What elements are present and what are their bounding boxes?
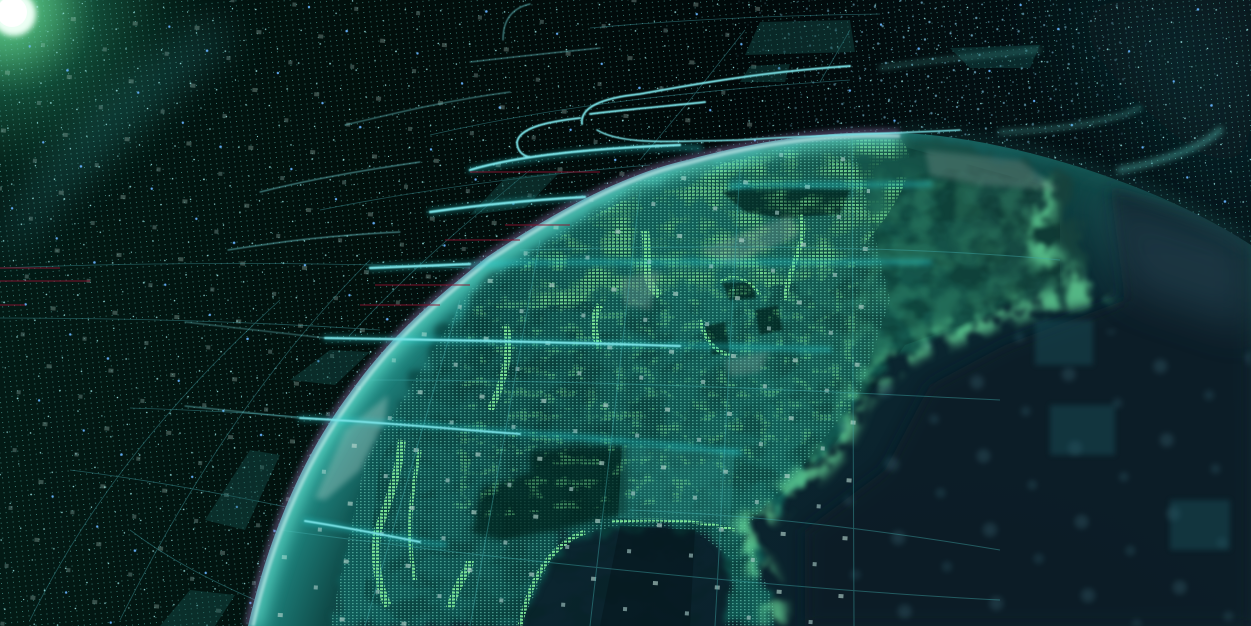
blurred haze far right: [1106, 198, 1251, 328]
cloud drift: [620, 150, 1060, 376]
bright data squares on globe: [250, 130, 870, 626]
sharp streak lines: [185, 4, 960, 542]
latitude and longitude grid: [0, 14, 880, 620]
streak glow layer: [300, 147, 930, 545]
ocean tiles: [1035, 320, 1230, 550]
gulf of mexico tile: [600, 526, 695, 626]
atmosphere rim: [248, 132, 1251, 626]
earth globe: [248, 132, 1251, 626]
dark terrain patches: [473, 186, 850, 540]
green continental highlights: [376, 215, 803, 626]
blurred arcs at right: [880, 50, 1220, 170]
lens flare top-left: [0, 0, 60, 60]
northeast mottled land: [840, 174, 1049, 396]
red chromatic scan lines: [0, 172, 600, 305]
ocean and atmosphere body: [248, 132, 1251, 626]
dotted green interior patches: [450, 260, 860, 520]
tinted grid tiles: [160, 20, 1040, 626]
light streaks and orbital trails: [185, 4, 1220, 545]
east coast glowing shoreline: [745, 180, 1090, 626]
out-of-focus data bokeh: [840, 330, 1251, 626]
white cloud on the limb: [315, 395, 388, 500]
green dotted northern canada: [520, 138, 909, 310]
dark mottled terrain: [360, 140, 1060, 626]
florida and texas tile highlight: [618, 445, 735, 525]
longitude lines on globe: [280, 135, 1060, 626]
dotted land texture: [330, 132, 890, 626]
dark eastern ocean tint: [928, 184, 1251, 622]
limb atmospheric inner glow: [248, 132, 900, 626]
north america land mass: [330, 132, 1095, 626]
